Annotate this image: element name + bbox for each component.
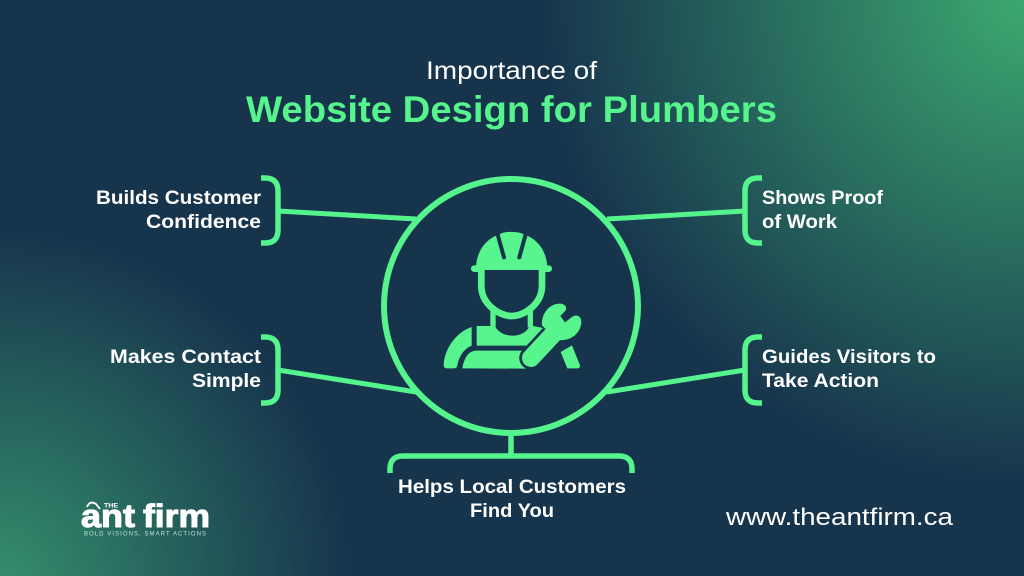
icon: lower bib [462,351,526,369]
label: builds customer confidence [96,188,262,233]
connector line [607,211,745,219]
icon: plumber with hard hat and wrench [444,232,581,369]
connector line [607,370,745,392]
title [246,57,777,130]
logo: the: THE [104,502,119,510]
title line: importance of: Importance of [426,57,597,85]
label: makes contact simple [110,347,262,392]
icon: wrench [531,304,581,358]
bracket [261,337,278,403]
icon: left shoulder [444,327,472,368]
label: helps local customers find you: Helps Local Customers [398,477,626,498]
logo: the ant firm [81,498,210,538]
label: makes contact simple: Makes Contact [110,347,262,368]
logo: ant antennae [87,503,100,509]
connector line [278,211,416,219]
label: shows proof of work: Shows Proof [762,188,884,209]
connector group: makes contact simple [261,337,416,403]
stem [508,436,514,456]
bracket [745,178,762,243]
connector group: shows proof of work [607,178,762,243]
label: helps local customers find you: Find You [470,501,554,522]
icon: hard hat [471,232,552,272]
label: shows proof of work: of Work [762,212,837,233]
label: shows proof of work [762,188,884,233]
central circle [384,179,638,433]
logo: tagline: BOLD VISIONS, SMART ACTIONS [84,532,206,538]
label: guides visitors to take action [762,347,936,392]
bracket [390,456,632,473]
icon: neck [493,306,530,327]
label: guides visitors to take action: Take Action [762,371,879,392]
connector group: builds customer confidence [261,178,416,243]
icon: overall bib [477,325,545,346]
connector line [278,370,416,392]
bracket [745,337,762,403]
label: makes contact simple: Simple [192,371,261,392]
label: guides visitors to take action: Guides Visitors to [762,347,936,368]
bracket [261,178,278,243]
label: builds customer confidence: Confidence [146,212,261,233]
icon: right hip [561,345,580,368]
label: builds customer confidence: Builds Customer [96,188,262,209]
icon: face outline [481,270,542,316]
website url: www.theantfirm.ca [725,504,954,531]
title line: website design for plumbers: Website Design for Plumbers [246,89,777,130]
connector group: helps local customers find you [390,436,632,473]
logo: firm wordmark: firm [143,498,210,534]
label: helps local customers find you [398,477,626,522]
logo: ant wordmark: ant [81,498,135,534]
connector group: guides visitors to take action [607,337,762,403]
